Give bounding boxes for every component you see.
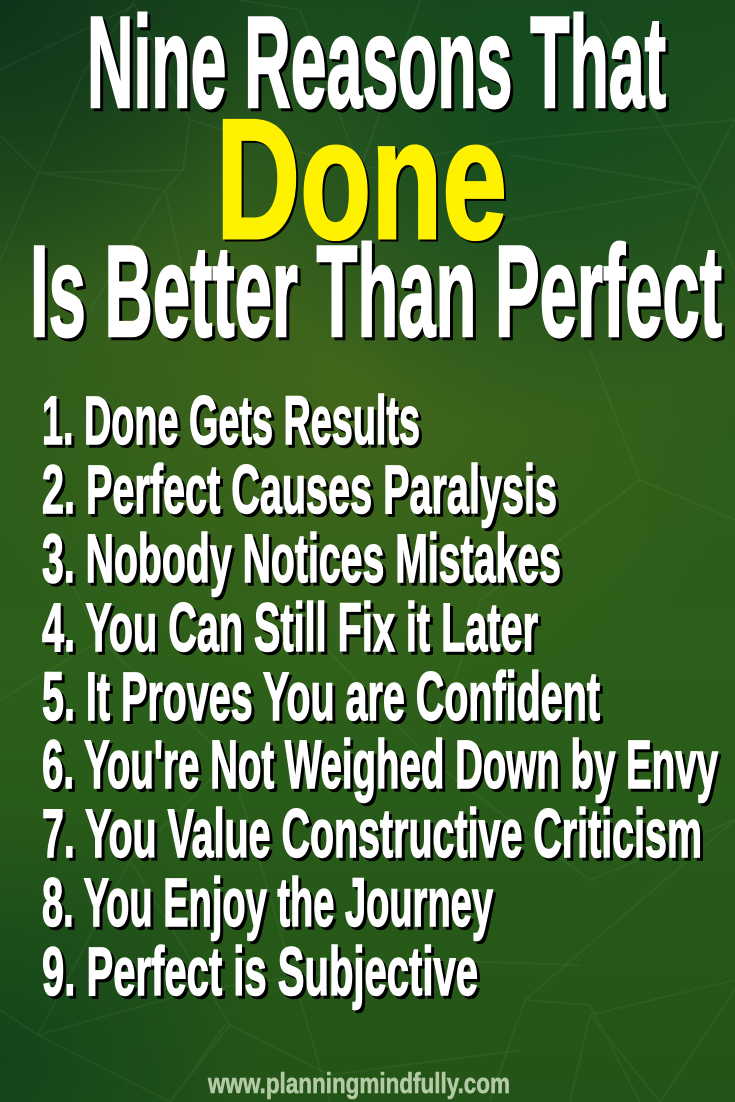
title line 2: Done: Done <box>216 84 507 275</box>
reason 1: 1. Done Gets Results <box>42 382 420 459</box>
list of nine reasons <box>42 382 721 1013</box>
reason 1: 1. Done Gets Results <box>45 385 423 462</box>
reason 1 <box>42 382 423 462</box>
title line 2: Done <box>216 84 509 277</box>
reason 8 <box>42 864 496 944</box>
footer url: www.planningmindfully.com <box>207 1068 510 1100</box>
title line 2: Done: Done <box>218 86 509 277</box>
title <box>30 0 725 367</box>
reason 9 <box>42 933 481 1013</box>
